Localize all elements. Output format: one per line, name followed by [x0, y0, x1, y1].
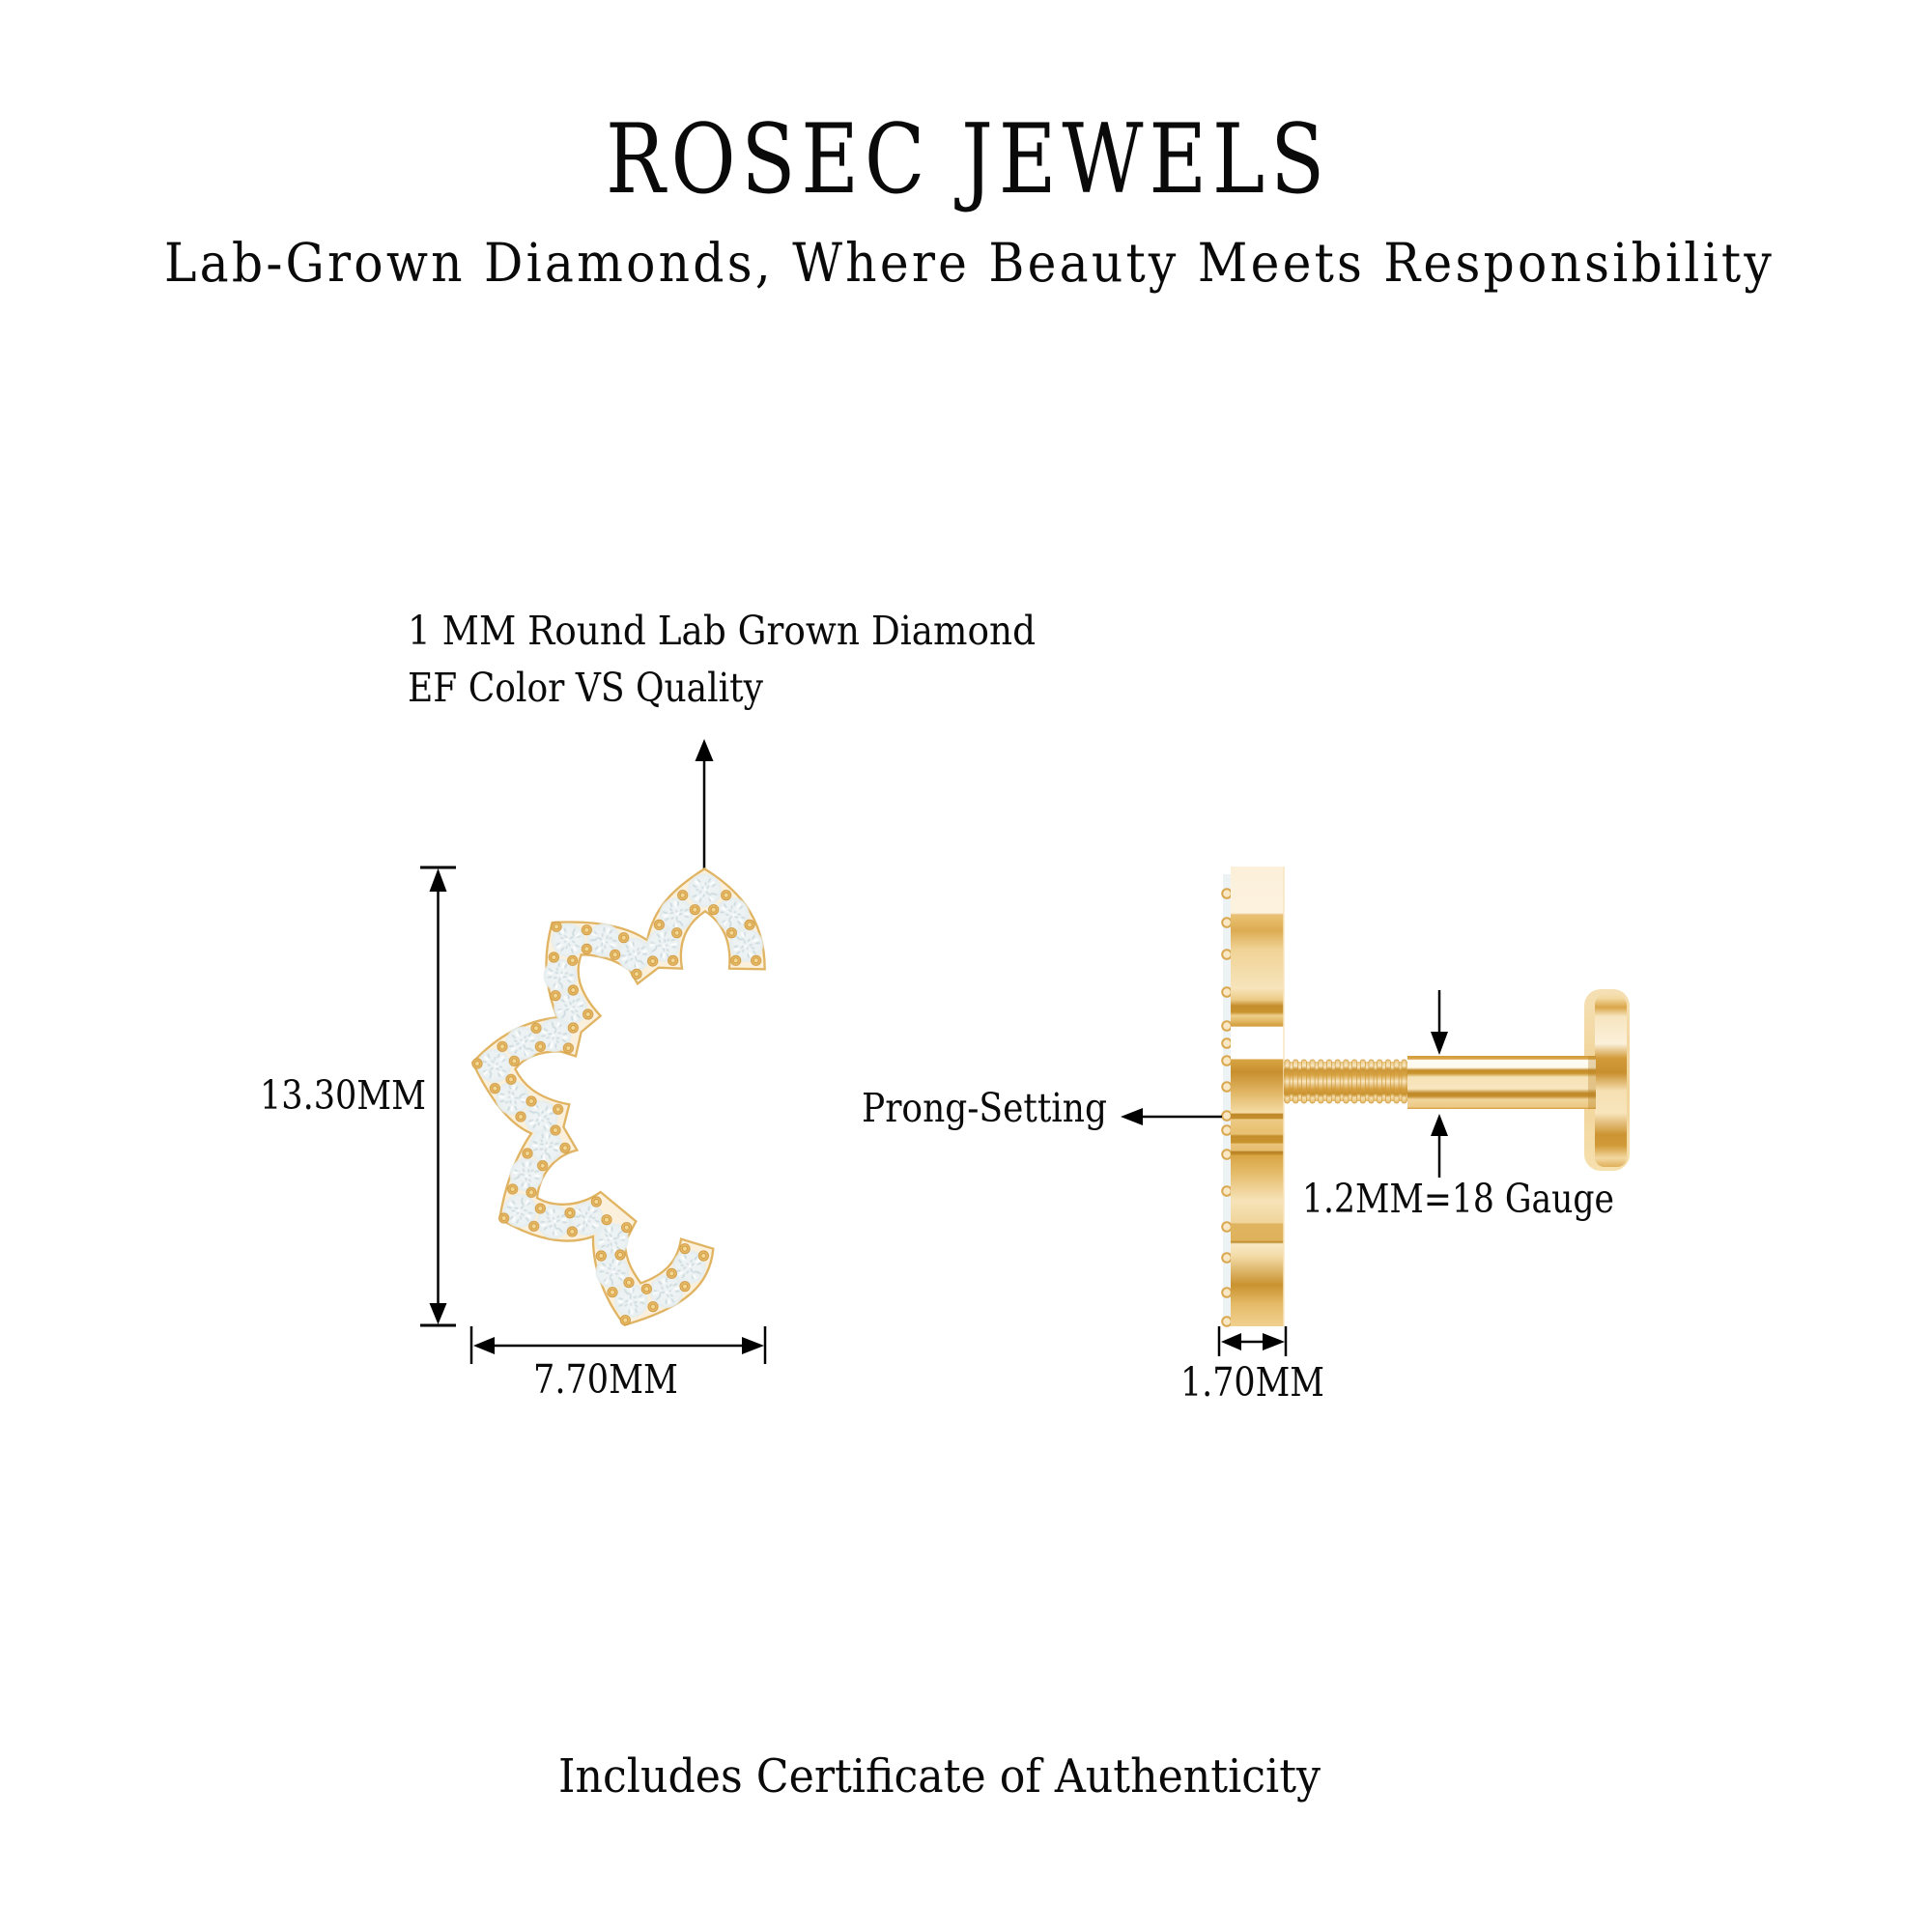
gauge label: 1.2MM=18 Gauge — [1302, 1176, 1614, 1222]
prong-setting label: Prong-Setting — [862, 1085, 1107, 1131]
subtitle: Lab-Grown Diamonds, Where Beauty Meets Responsibility — [164, 232, 1775, 294]
metal outline — [472, 868, 765, 1325]
arrow: diamond callout pointer — [696, 739, 713, 874]
gold plate — [1231, 867, 1283, 1326]
arrow: prong-setting pointer — [1121, 1108, 1222, 1125]
prongs — [472, 890, 761, 1325]
threaded section — [1284, 1060, 1407, 1103]
shaft shadow near disc — [1588, 1056, 1596, 1109]
arrow: gauge arrow from bottom — [1431, 1114, 1448, 1178]
dimension: thickness 1.70MM — [1180, 1326, 1324, 1406]
earring front view: lotus half outline with diamonds — [472, 868, 768, 1325]
diamonds — [477, 873, 768, 1324]
smooth shaft — [1407, 1056, 1596, 1109]
diamond specification callout: EF Color VS Quality — [408, 665, 764, 711]
arrow: gauge arrow from top — [1431, 990, 1448, 1055]
dimension: height 13.30MM: 13.30MM — [260, 1072, 426, 1119]
dimension: width 7.70MM: 7.70MM — [533, 1356, 678, 1403]
title: ROSEC JEWELS — [606, 104, 1330, 215]
disc face — [1595, 995, 1627, 1167]
plate right edge — [1283, 867, 1285, 1326]
dimension: thickness 1.70MM: 1.70MM — [1180, 1359, 1324, 1406]
diamond specification callout — [408, 608, 1036, 711]
diamond specification callout: 1 MM Round Lab Grown Diamond — [408, 608, 1036, 654]
earring side view: flat-back labret post — [1222, 867, 1630, 1326]
dimension: height 13.30MM — [260, 867, 456, 1325]
dimension: width 7.70MM — [471, 1326, 765, 1403]
side prongs — [1222, 889, 1232, 1326]
diamond edge strip — [1223, 874, 1232, 1323]
disc rim — [1584, 989, 1630, 1171]
footer: certificate note: Includes Certificate of Authenticity — [558, 1749, 1321, 1804]
